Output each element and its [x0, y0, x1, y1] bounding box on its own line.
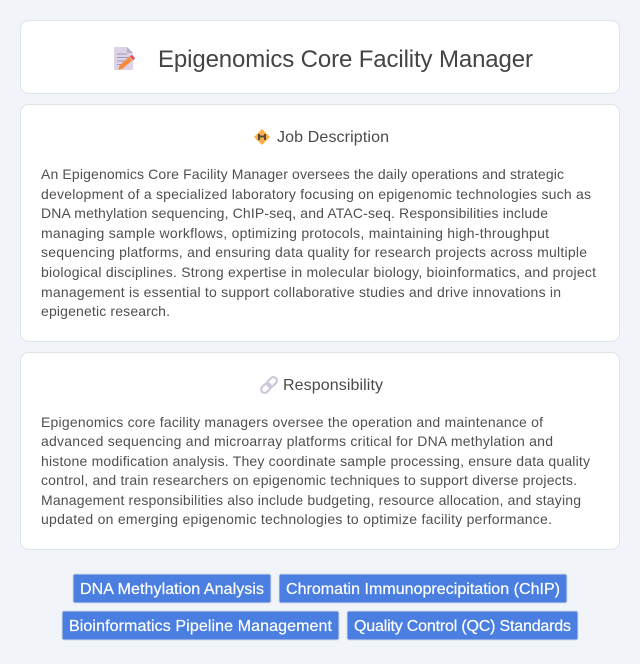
tag: bioinformatics pipeline management: Bioinformatics Pipeline Management	[69, 618, 333, 635]
text: responsibility paragraph: advanced sequencing and microarray platforms critical for DNA methylation and	[41, 433, 553, 449]
text: responsibility paragraph: Epigenomics core facility managers oversee the operation and maintenance of	[41, 414, 543, 430]
text: responsibility paragraph: updated on emerging epigenomic technologies to optimize facility performance.	[41, 511, 552, 527]
panel: title	[20, 20, 620, 94]
icon: diamond sign	[254, 129, 270, 145]
text: job description paragraph: biological disciplines. Strong expertise in molecular biology, bioinformatics, and project	[41, 264, 596, 280]
tag: chromatin immunoprecipitation: Chromatin Immunoprecipitation (ChIP)	[286, 581, 560, 598]
tag: bioinformatics pipeline management	[62, 611, 339, 640]
text: job description paragraph: management is essential to support collaborative studies and drive innovations in	[41, 284, 561, 300]
text: job description paragraph: An Epigenomics Core Facility Manager oversees the daily operations and strategic	[41, 166, 564, 182]
text: responsibility paragraph: histone modification analysis. They coordinate sample processing, ensure data quality	[41, 453, 590, 469]
text: job description paragraph: development of a specialized laboratory focusing on epigenomic technologies such as	[41, 186, 591, 202]
tag: quality control standards	[347, 611, 578, 640]
heading: job description: Job Description	[277, 129, 389, 146]
text: job description paragraph	[41, 166, 596, 319]
tag: quality control standards: Quality Control (QC) Standards	[354, 618, 571, 635]
panel: job description	[20, 104, 620, 342]
text: job description paragraph: sequencing platforms, and ensuring data quality for research projects across multiple	[41, 244, 587, 260]
text: job description paragraph: DNA methylation sequencing, ChIP-seq, and ATAC-seq. Responsibilities include	[41, 205, 548, 221]
icon: chain link	[260, 376, 278, 394]
text: responsibility paragraph	[41, 414, 590, 527]
icon: document with pencil	[114, 47, 135, 70]
tag: chromatin immunoprecipitation	[279, 574, 567, 603]
heading: title text: Epigenomics Core Facility Manager	[158, 46, 533, 73]
text: responsibility paragraph: Management responsibilities also include budgeting, resource allocation, and staying	[41, 492, 581, 508]
heading: responsibility: Responsibility	[283, 377, 383, 394]
text: job description paragraph: epigenetic research.	[41, 303, 170, 319]
tag: DNA methylation analysis: DNA Methylation Analysis	[80, 581, 264, 598]
tag: DNA methylation analysis	[73, 574, 271, 603]
panel: responsibility	[20, 352, 620, 550]
text: responsibility paragraph: control, and train researchers on epigenomic techniques to support diverse projects.	[41, 472, 577, 488]
text: job description paragraph: managing sample workflows, optimizing protocols, maintaining high-throughput	[41, 225, 549, 241]
